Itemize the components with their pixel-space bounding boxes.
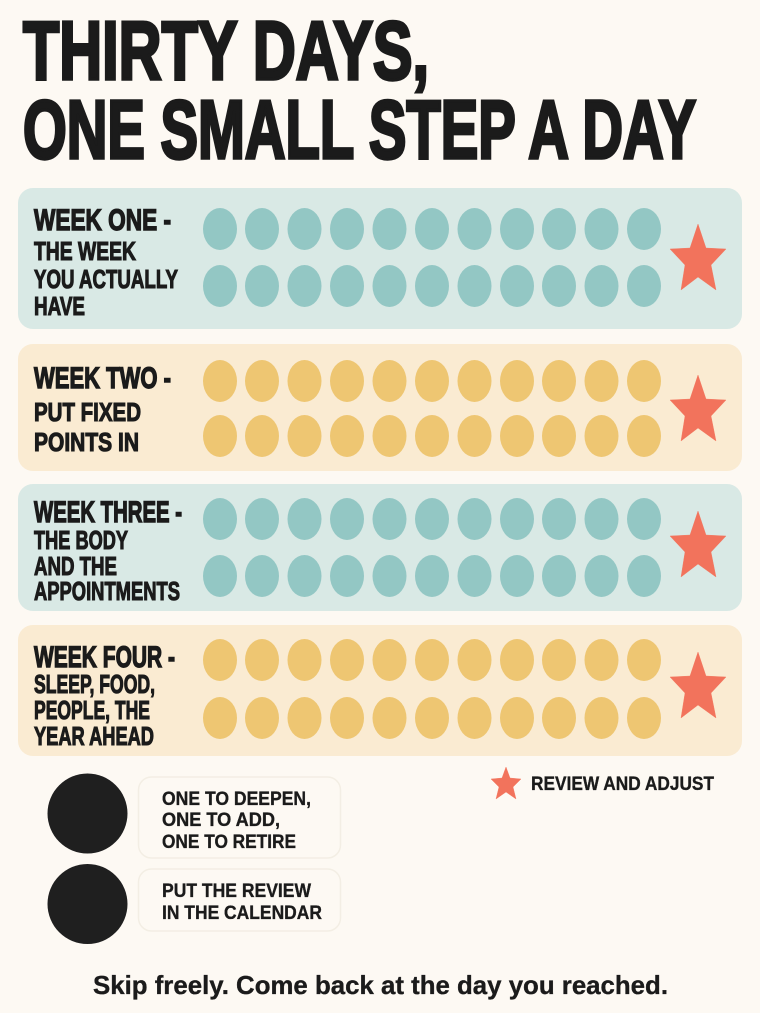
week three label: WEEK THREE - <box>34 496 182 529</box>
callout: deepen add retire: ONE TO ADD, <box>162 810 280 831</box>
panel: week three <box>18 484 742 611</box>
week four label: SLEEP, FOOD, <box>34 669 155 699</box>
callout: calendar review: PUT THE REVIEW <box>162 881 311 902</box>
icon: review star <box>670 511 726 577</box>
title <box>23 4 696 176</box>
week one day dots <box>203 208 661 307</box>
callout: deepen add retire <box>138 777 340 858</box>
callout: calendar review: IN THE CALENDAR <box>162 903 322 924</box>
week four label: WEEK FOUR - <box>34 641 175 674</box>
legend: review and adjust: REVIEW AND ADJUST <box>531 774 714 795</box>
icon: legend star <box>491 767 521 799</box>
week one label: WEEK ONE - <box>34 204 171 237</box>
footer note: Skip freely. Come back at the day you reached. <box>93 970 668 1000</box>
week three day dots <box>203 498 661 597</box>
week two label <box>34 362 171 457</box>
icon: review star <box>670 652 726 718</box>
week two day dots <box>203 360 661 457</box>
week three label: APPOINTMENTS <box>34 576 180 606</box>
callout: deepen add retire: ONE TO RETIRE <box>162 832 296 853</box>
callout: calendar review <box>138 869 340 931</box>
week one label: YOU ACTUALLY <box>34 264 178 294</box>
panel: week two <box>18 344 742 471</box>
title: THIRTY DAYS, <box>23 4 429 97</box>
week four label <box>34 641 175 751</box>
week two label: PUT FIXED <box>34 397 141 427</box>
callout: deepen add retire: ONE TO DEEPEN, <box>162 789 311 810</box>
legend: review and adjust <box>491 767 714 799</box>
icon: black circle two <box>48 864 128 944</box>
week four day dots <box>203 639 661 739</box>
week three label <box>34 496 182 606</box>
week one label: THE WEEK <box>34 236 136 266</box>
panel: week four <box>18 625 742 756</box>
week one label: HAVE <box>34 291 85 321</box>
icon: review star <box>670 375 726 441</box>
panel: week one <box>18 188 742 329</box>
week four label: PEOPLE, THE <box>34 695 150 725</box>
icon: review star <box>670 224 726 290</box>
week four label: YEAR AHEAD <box>34 721 154 751</box>
week two label: WEEK TWO - <box>34 362 171 395</box>
week three label: THE BODY <box>34 525 128 555</box>
week one label <box>34 204 178 321</box>
icon: black circle one <box>48 774 128 854</box>
week two label: POINTS IN <box>34 427 139 457</box>
week three label: AND THE <box>34 551 117 581</box>
